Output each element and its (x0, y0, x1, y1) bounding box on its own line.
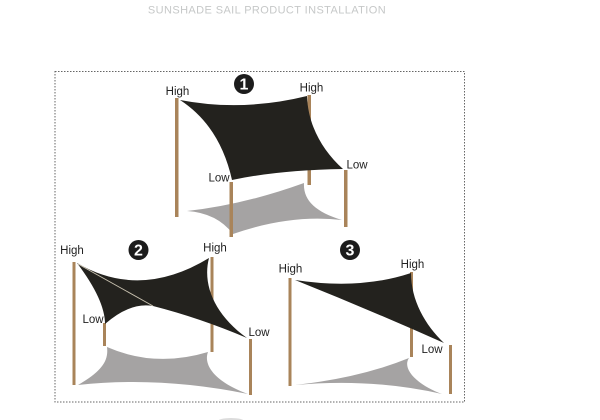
labels 1: Low (208, 172, 230, 184)
badge 1: 1 (240, 76, 249, 94)
poles 2 (72, 257, 252, 395)
badge 1 (234, 74, 254, 94)
labels 1: High (166, 86, 189, 98)
diagram 1: four-point sail (166, 74, 368, 237)
labels 2: High (203, 242, 227, 254)
seam 2 (78, 264, 153, 306)
labels 2: High (60, 245, 84, 257)
badge 2 (128, 240, 148, 260)
shadow 2 (78, 347, 248, 394)
labels 2: Low (82, 314, 104, 326)
poles 1 (175, 95, 348, 237)
shadow 3 (295, 358, 442, 394)
labels 1: High (300, 82, 323, 94)
shadow 1 (187, 183, 342, 234)
badge 3: 3 (346, 242, 355, 260)
sail 2 (77, 258, 247, 338)
sail 1 (180, 96, 343, 180)
labels 3 (279, 259, 443, 356)
labels 2 (60, 242, 270, 339)
labels 3: High (401, 259, 424, 271)
sail 3 (295, 273, 444, 343)
diagram 2: crossed sail (60, 240, 270, 395)
poles 3 (288, 272, 452, 394)
labels 3: Low (421, 344, 443, 356)
labels 1 (166, 82, 368, 184)
faint smudge at bottom edge (218, 418, 244, 420)
diagram 3: triangle sail (279, 240, 452, 394)
labels 2: Low (248, 327, 270, 339)
badge 3 (340, 240, 360, 260)
labels 1: Low (346, 160, 368, 172)
badge 2: 2 (134, 242, 143, 260)
labels 3: High (279, 264, 302, 276)
title: SUNSHADE SAIL PRODUCT INSTALLATION (148, 4, 386, 16)
dotted frame (55, 72, 464, 402)
